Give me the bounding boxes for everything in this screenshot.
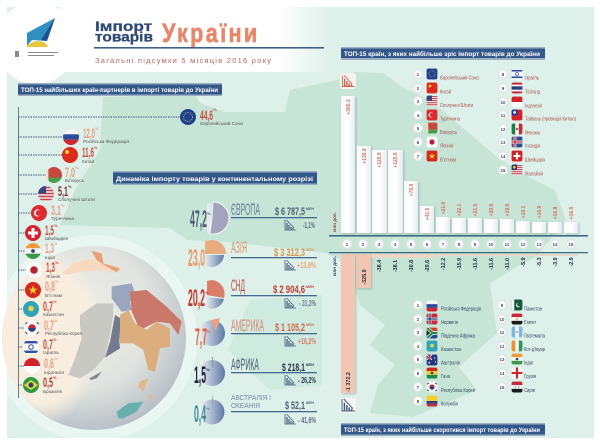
list: decline countries: 2 (417, 317, 420, 322)
list: decline countries: 15 (500, 385, 505, 390)
flag: India: Індія (45, 255, 55, 260)
region: America: % (207, 329, 211, 334)
flag: India: % (54, 241, 58, 246)
list: decline countries: 10 (500, 317, 505, 322)
list: growth countries: Сполучені Штати (440, 103, 473, 109)
list: growth countries: В'єтнам (440, 158, 456, 164)
axis with numbers: 14 (553, 242, 558, 247)
region: Europe (190, 200, 317, 234)
region: America (195, 316, 317, 351)
region: CIS: СНД (231, 276, 245, 295)
axis with numbers: 2 (362, 242, 365, 247)
region: CIS (188, 276, 317, 312)
flag: Indonesia: 0,6 (44, 355, 54, 371)
axis with numbers: 4 (394, 242, 397, 247)
list: decline countries: Кот-д'Івуар (524, 347, 545, 353)
list: decline countries: Сирія (524, 388, 535, 394)
region: America: МЛН (306, 323, 314, 327)
flag: India (25, 242, 58, 260)
flag: Turkey (31, 204, 74, 221)
region: Europe: -1,1% (303, 221, 315, 230)
chart: decline bars: -11.6 (489, 258, 495, 270)
header band (7, 7, 324, 83)
flag: Kazakhstan: 0,7 (43, 298, 53, 314)
list: growth countries: 2 (417, 86, 420, 91)
subtitle: Загальні підсумки 5 місяців 2016 року (95, 56, 271, 65)
list: growth countries: 14 (501, 154, 506, 159)
list: decline countries: 5 (417, 357, 420, 362)
list: growth countries: Тайвань (провінція Китаю) (525, 116, 576, 122)
region: Asia: АЗІЯ (231, 238, 247, 257)
region: CIS: 20,2 (188, 285, 205, 312)
flag: Israel: 0,7 (43, 336, 53, 352)
flag: EU (180, 107, 243, 126)
chart: decline bars: -2.9 (569, 257, 575, 267)
flag: Brazil (23, 376, 62, 394)
list: decline countries: Грузія (524, 374, 536, 380)
chart: growth bars (332, 96, 578, 233)
region: Australia and Oceania: МЛН (306, 401, 314, 405)
list: decline countries: Гана (441, 374, 451, 380)
heading: top growth: ТОП-15 країн, з яких найбільше зріс імпорт товарів до України (344, 50, 540, 58)
flag: South Korea: 0,7 (44, 317, 54, 333)
region: Australia and Oceania: - 41,6% (298, 416, 316, 425)
list: growth countries: Європейський Союз (440, 74, 479, 82)
heading: continental dynamics: Динаміка імпорту товарів у континентальному розрізі (116, 175, 313, 183)
list: growth countries: 1 (417, 72, 420, 77)
region: Africa: $ 218,1 (282, 362, 305, 374)
chart: growth bars: +19.8 (505, 203, 511, 216)
title: України (162, 19, 257, 49)
region: Asia (188, 238, 317, 272)
axis with numbers: 7 (442, 242, 445, 247)
flag: EU: % (213, 107, 217, 112)
list: decline countries: Єгипет (524, 320, 536, 326)
flag: Belarus: Білорусь (65, 178, 85, 183)
region: CIS: - 31,3% (299, 299, 316, 308)
axis with numbers: 3 (378, 242, 381, 247)
chart: decline bars: -11.0 (505, 258, 511, 270)
region: Europe: $ 6 787,5 (275, 206, 305, 218)
region: Australia and Oceania: ОКЕАНІЯ (231, 401, 260, 410)
list: decline countries: 8 (417, 399, 420, 404)
list: growth countries: Туреччина (440, 116, 461, 122)
list: growth countries: 12 (501, 127, 506, 132)
flag: Indonesia: Індонезія (44, 370, 65, 375)
chart: growth bars: +20.8 (489, 203, 495, 216)
region: Australia and Oceania: 0,4 (194, 401, 206, 428)
title: товарів (95, 28, 153, 44)
region: CIS: $ 2 904,6 (273, 284, 305, 296)
list: growth countries: 8 (502, 72, 505, 77)
flag: Switzerland: Швейцарія (45, 235, 69, 241)
flag: South Korea (24, 320, 82, 336)
icon: decline chart (340, 398, 356, 413)
chart: growth bars: +78.8 (409, 183, 415, 196)
chart: decline bars: -5.9 (521, 257, 527, 267)
region: Asia: +13,8% (297, 261, 316, 270)
heading: top 15 partners: ТОП-15 найбільших країн-партнерів в імпорті товарів до України (21, 86, 218, 94)
title (95, 18, 257, 49)
region: America: +16,2% (298, 337, 316, 346)
region: Asia: % (205, 250, 209, 255)
list: decline countries: Республіка Корея (441, 388, 475, 394)
flag: China: % (94, 145, 98, 150)
chart: decline bars: -15.9 (457, 258, 463, 270)
flag: EU: 44,6 (200, 107, 213, 123)
list: growth countries: Ісландія (525, 144, 540, 150)
chart: growth bars: +125.8 (377, 152, 383, 168)
flag: USA: Сполучені Штати (58, 197, 95, 202)
flag: Kazakhstan: Казахстан (43, 312, 64, 317)
flag: Kazakhstan (23, 300, 64, 317)
chart: growth bars: +22.1 (457, 203, 463, 216)
map of Ukraine background (60, 72, 566, 417)
list: growth countries: Мексика (525, 130, 541, 136)
chart: decline bars: млн дол. (332, 256, 337, 276)
list: decline countries: 3 (417, 330, 420, 335)
list: growth countries: 15 (501, 168, 506, 173)
region: Asia: МЛН (306, 248, 314, 252)
list: decline countries: 13 (500, 357, 505, 362)
flag: Japan: 1,3 (46, 259, 55, 275)
list: decline countries: 4 (417, 344, 420, 349)
list: growth countries: 7 (417, 154, 420, 159)
region: CIS: МЛН (306, 285, 314, 289)
axis with numbers: 11 (505, 242, 510, 247)
flag: Switzerland (25, 224, 68, 241)
heading: continental dynamics (113, 171, 317, 185)
flag: China: Китай (82, 158, 94, 164)
flag: Switzerland: % (54, 223, 58, 228)
flag: Vietnam: % (55, 279, 59, 284)
chart: decline bars: -38.4 (377, 260, 383, 272)
flag: Kazakhstan: % (53, 299, 57, 304)
flag: Russia (63, 128, 129, 145)
list: growth countries: 3 (417, 99, 420, 104)
flag: Israel (23, 338, 59, 355)
flag: Israel: % (53, 337, 57, 342)
flag: India: 1,3 (45, 240, 54, 256)
list: growth countries: Японія (440, 144, 453, 150)
axis with numbers: 13 (537, 242, 542, 247)
region: Europe: 47,2 (190, 206, 207, 233)
list: decline countries: 12 (500, 344, 505, 349)
logo: ministry mark (15, 18, 58, 57)
flag: Russia: % (95, 126, 99, 131)
chart: decline bars: -30.8 (409, 260, 415, 272)
list: growth countries: Швейцарія (525, 156, 545, 164)
flag: USA (38, 186, 95, 202)
region: Africa: - 26,2% (298, 376, 316, 385)
region: Australia and Oceania: АВСТРАЛІЯ І (231, 393, 271, 402)
chart: decline bars: -12.2 (441, 258, 447, 270)
chart: decline bars: -1 372.2 (346, 372, 352, 392)
flag: China: 11,6 (82, 144, 94, 160)
list: decline countries: 7 (417, 385, 420, 390)
list: decline countries: 6 (417, 371, 420, 376)
region: America: $ 1 105,2 (275, 322, 305, 334)
flag: Indonesia: % (54, 356, 58, 361)
list: growth countries: 9 (502, 86, 505, 91)
flag: South Korea: Республіка Корея (45, 331, 82, 336)
list: growth countries: Індонезія (525, 104, 542, 110)
flag: China (62, 146, 98, 163)
flag: EU: Європейський Союз (200, 120, 243, 126)
flag: Belarus (46, 166, 84, 183)
chart: decline bars: -5.3 (537, 257, 543, 267)
title: Імпорт (95, 18, 152, 34)
list: growth countries (413, 69, 576, 178)
list: growth countries: 4 (417, 113, 420, 118)
chart: growth bars: +18.1 (521, 205, 527, 218)
chart: decline bars: -3.9 (553, 257, 559, 267)
region: Australia and Oceania (194, 393, 317, 428)
axis with numbers: 10 (489, 242, 494, 247)
chart: growth bars: +16.8 (553, 206, 559, 219)
list: growth countries: Таїланд (525, 90, 540, 96)
icon: growth chart (340, 73, 356, 89)
list: decline countries: Норвегія (441, 320, 458, 326)
chart: decline bars: -11.6 (473, 258, 479, 270)
heading: top 15 partners (18, 83, 222, 96)
axis with numbers: 8 (458, 242, 461, 247)
chart: decline bars: -38.1 (393, 260, 399, 272)
region: Africa: АФРИКА (231, 355, 259, 374)
region: America: АМЕРИКА (231, 316, 264, 335)
chart: decline bars: -29.6 (425, 260, 431, 272)
list: decline countries (413, 300, 546, 408)
region: Europe: МЛН (306, 207, 314, 211)
flag: Japan (26, 262, 60, 278)
list: decline countries: Колумбія (441, 402, 458, 408)
chart: growth bars: +16.9 (537, 205, 543, 218)
region: Africa (194, 355, 317, 389)
flag: Belarus: % (75, 165, 79, 170)
flag: Turkey: Туреччина (51, 216, 74, 221)
chart: growth bars: +16.5 (569, 206, 575, 219)
list: growth countries: 11 (501, 113, 506, 118)
flag: Israel: Ізраїль (43, 350, 60, 355)
logo circle (7, 7, 65, 83)
chart: growth bars: +21.5 (473, 203, 479, 216)
chart: decline bars: -325.9 (362, 269, 368, 285)
list: growth countries: 13 (501, 140, 506, 145)
chart: growth bars: +41.5 (425, 207, 431, 220)
list: decline countries: Казахстан (441, 347, 461, 353)
region: Australia and Oceania: % (206, 406, 210, 411)
flag: Russia: Російська Федерація (83, 138, 130, 144)
list: decline countries: 1 (417, 303, 420, 308)
list: decline countries: 14 (500, 371, 505, 376)
region: America: 7,7 (195, 324, 207, 351)
axis with numbers: 6 (426, 242, 429, 247)
flag: South Korea: % (54, 318, 58, 323)
list: decline countries: Російська Федерація (441, 306, 481, 312)
region: Africa: МЛН (306, 363, 314, 367)
flag: Switzerland: 1,5 (45, 222, 54, 238)
flag: Vietnam (25, 280, 62, 298)
list: growth countries: 6 (417, 140, 420, 145)
list: decline countries: Гватемала (524, 334, 546, 340)
flag: Brazil: % (53, 375, 57, 380)
list: decline countries: Пакистан (524, 306, 542, 312)
region: Africa: % (206, 367, 210, 372)
axis with numbers: 5 (410, 242, 413, 247)
flag: USA: % (68, 184, 72, 189)
axis with numbers: 1 (346, 242, 349, 247)
list: decline countries: Індія (524, 360, 533, 366)
flag: USA: 5,1 (58, 183, 68, 199)
flag: Vietnam: В'єтнам (45, 293, 62, 298)
region: Australia and Oceania: $ 52,1 (285, 400, 305, 412)
flag: Brazil: 0,5 (43, 374, 53, 390)
chart: growth bars: +125.8 (393, 152, 399, 168)
flag: Japan: Японія (46, 274, 60, 279)
flag: Brazil: Бразилія (43, 389, 63, 394)
flag: Turkey: % (61, 203, 65, 208)
axis with numbers: 12 (521, 242, 526, 247)
chart: growth bars: млн дол. (332, 212, 337, 232)
flag: Indonesia (24, 358, 64, 375)
region: Africa: 1,5 (194, 362, 206, 389)
list: decline countries: 9 (501, 303, 504, 308)
region: Asia: 23,0 (188, 245, 205, 272)
chart: growth bars: +21.9 (441, 201, 447, 214)
chart: growth bars: +305.3 (346, 99, 352, 115)
list: growth countries: Білорусь (440, 130, 457, 136)
region: CIS: % (205, 290, 209, 295)
globe (0, 235, 197, 441)
flag: Russia: 12,0 (83, 125, 95, 141)
axis with numbers: 15 (569, 242, 574, 247)
axis with numbers: 9 (474, 242, 477, 247)
flag: Belarus: 7,0 (65, 164, 75, 180)
list: growth countries: 10 (501, 100, 506, 105)
list: growth countries: Ізраїль (525, 76, 539, 82)
list: growth countries: Малайзія (525, 170, 543, 178)
flag: Japan: % (55, 260, 59, 265)
axis with numbers (329, 235, 588, 253)
list: decline countries: Південна Африка (441, 334, 476, 340)
list: decline countries: 11 (500, 330, 505, 335)
flag: Turkey: 3,1 (51, 202, 61, 218)
chart: top 15 partners (18, 107, 243, 398)
chart: decline bars (332, 254, 578, 393)
region: Europe: % (207, 211, 211, 216)
region: Europe: ЄВРОПА (231, 200, 260, 219)
list: growth countries: 5 (417, 126, 420, 131)
chart: growth bars: +130.9 (362, 148, 368, 164)
flag: Vietnam: 0,8 (45, 278, 55, 294)
heading: top decline: ТОП-15 країн, з яких найбільше скоротився імпорт товарів до України (344, 426, 540, 434)
heading: top decline (341, 423, 545, 436)
list: decline countries: Австралія (441, 360, 460, 366)
heading: top growth (341, 47, 545, 60)
list: growth countries: Китай (440, 88, 451, 96)
region: Asia: $ 3 312,3 (274, 247, 305, 259)
